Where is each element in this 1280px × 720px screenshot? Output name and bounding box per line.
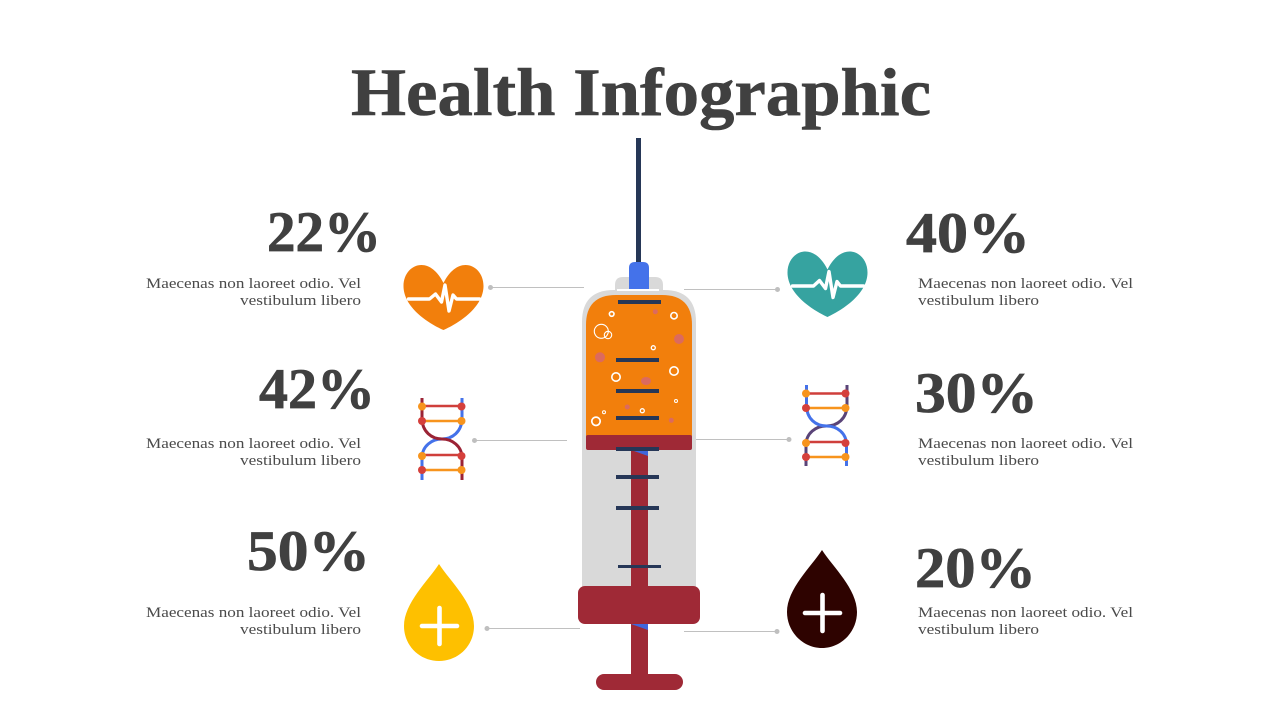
syringe illustration [578,138,700,690]
stat: 40% [906,202,1133,309]
description: vestibulum libero [918,293,1039,309]
connector: 20% [684,629,780,634]
needle [636,138,641,264]
connector: 50% [484,626,580,631]
description [146,605,361,638]
stat: 50% [146,520,370,638]
white bubbles [592,312,678,425]
title: Health Infographic [351,54,931,130]
description: Maecenas non laoreet odio. Vel [918,436,1133,452]
value: 22% [267,201,381,264]
connector: 30% [696,437,792,442]
description [146,436,361,469]
syringe collar [615,277,663,291]
connector: 40% [684,287,780,292]
description: Maecenas non laoreet odio. Vel [146,276,361,292]
plunger rod [631,450,648,676]
value: 40% [906,202,1030,265]
description: Maecenas non laoreet odio. Vel [918,605,1133,621]
connector: 22% [488,285,584,290]
description: vestibulum libero [918,453,1039,469]
value: 50% [247,520,370,583]
icon: teal heart [788,252,868,317]
stat: 30% [915,362,1133,469]
description: vestibulum libero [240,293,361,309]
description: Maecenas non laoreet odio. Vel [146,436,361,452]
value: 30% [915,362,1038,425]
stat: 22% [146,201,381,309]
barrel [582,290,696,590]
plunger seal [586,435,692,450]
icon: DNA right [802,385,850,466]
pink bubbles [595,309,684,423]
description [918,605,1133,638]
description: vestibulum libero [918,622,1039,638]
thumb rest [596,674,683,690]
measure marks [616,300,661,568]
rod shadows [631,450,648,630]
finger flange [578,586,700,624]
description [918,436,1133,469]
icon: DNA left [418,398,466,480]
orange liquid [586,295,692,440]
description: Maecenas non laoreet odio. Vel [918,276,1133,292]
connector: 42% [472,438,567,443]
stat: 20% [915,537,1133,638]
description [146,276,361,309]
icon: yellow drop [404,564,474,661]
stat: 42% [146,358,375,469]
description: Maecenas non laoreet odio. Vel [146,605,361,621]
icon: dark drop [787,550,857,648]
value: 20% [915,537,1036,600]
needle hub [629,262,649,290]
description [918,276,1133,309]
value: 42% [259,358,375,421]
description: vestibulum libero [240,622,361,638]
icon: orange heart [404,265,484,330]
description: vestibulum libero [240,453,361,469]
